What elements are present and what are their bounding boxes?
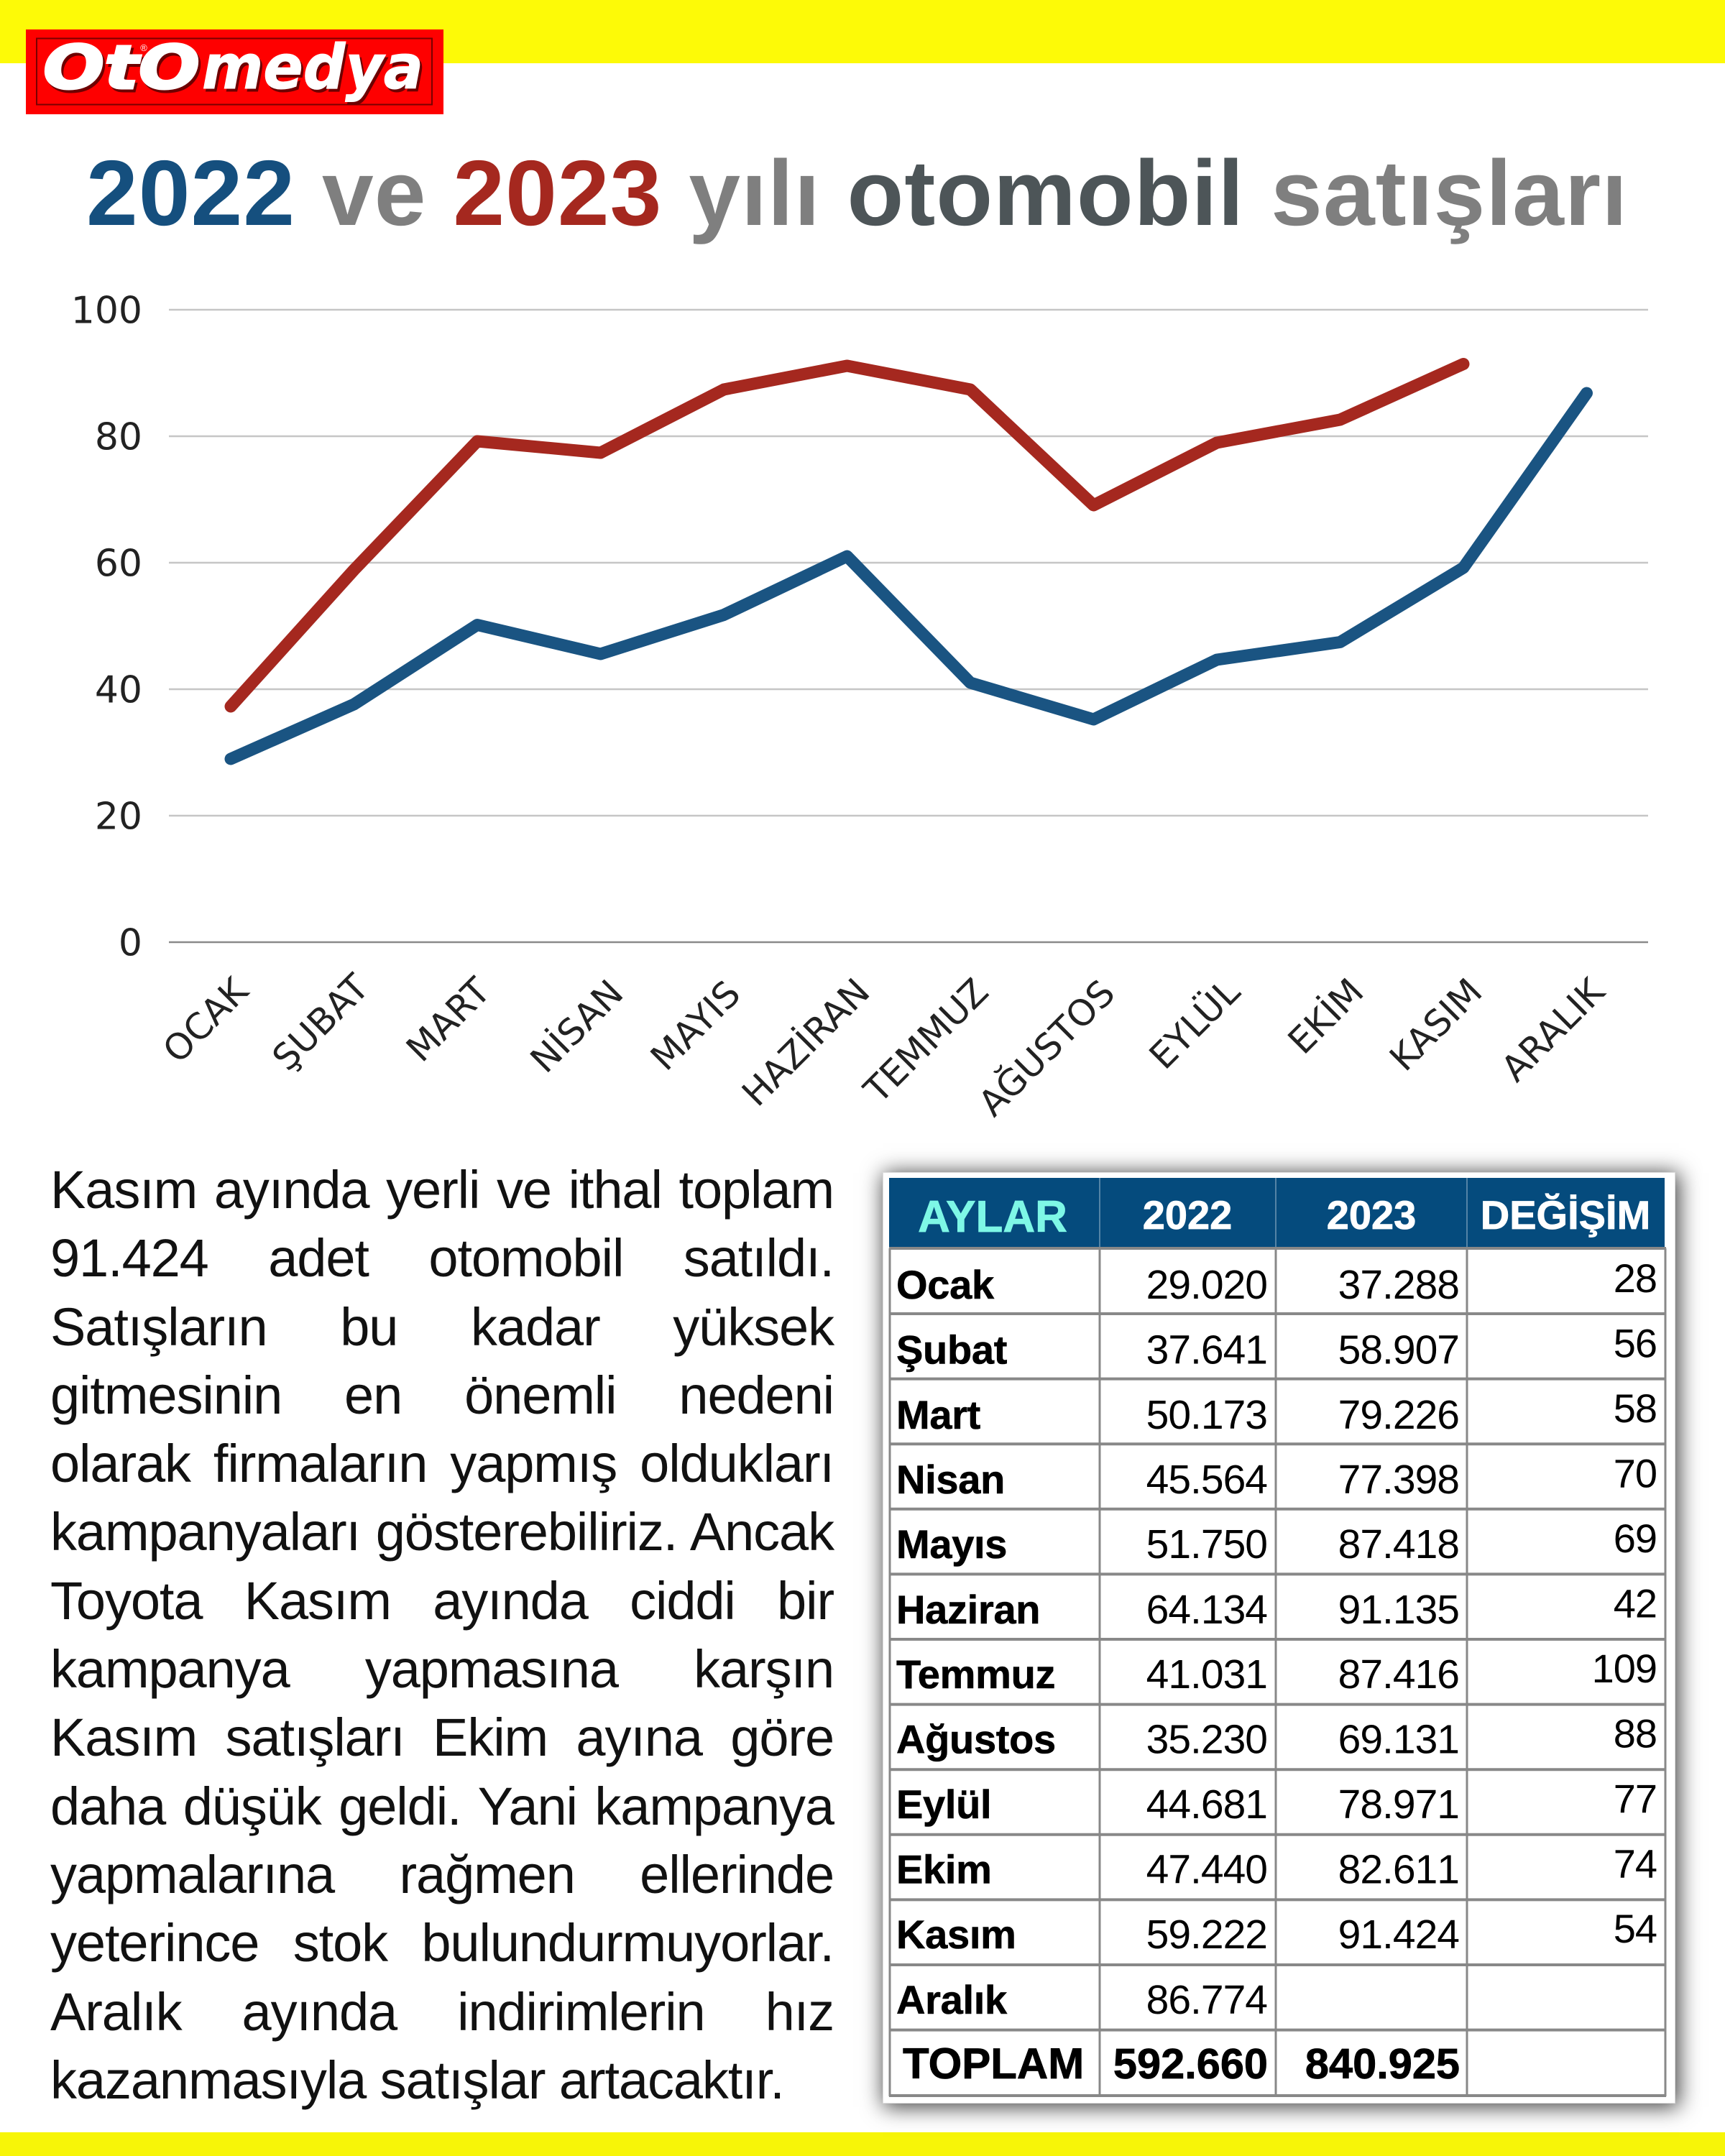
2023 column: 87.418	[1338, 1521, 1459, 1567]
table header: 2022	[1143, 1192, 1232, 1238]
x axis labels: NİSAN	[523, 972, 631, 1081]
2022 column: 29.020	[1146, 1262, 1267, 1308]
month labels: Ocak	[896, 1262, 995, 1307]
y axis labels: 80	[95, 415, 142, 459]
data table panel	[883, 1173, 1675, 2103]
month labels: Nisan	[896, 1457, 1005, 1502]
total row: 592.660	[1113, 2040, 1268, 2088]
line chart	[71, 289, 1648, 1125]
total row	[903, 2040, 1460, 2088]
month labels: Ekim	[896, 1847, 992, 1892]
2023 column: 87.416	[1338, 1651, 1459, 1697]
change column: 42	[1614, 1581, 1657, 1626]
month labels: Ağustos	[896, 1716, 1056, 1762]
2022 column: 86.774	[1146, 1977, 1267, 2023]
bottom yellow band	[0, 2132, 1725, 2156]
body paragraph: kazanmasıyla satışlar artacaktır.	[50, 2050, 784, 2110]
2023 column: 58.907	[1338, 1327, 1459, 1373]
change column	[1592, 1256, 1657, 1951]
x axis labels	[155, 966, 1613, 1125]
x axis labels: AĞUSTOS	[970, 972, 1123, 1125]
change column: 77	[1614, 1776, 1657, 1821]
y axis labels: 20	[95, 795, 142, 838]
x axis labels: MART	[398, 969, 499, 1070]
table header: AYLAR	[918, 1192, 1067, 1242]
body paragraph: yeterince stok bulundurmuyorlar.	[50, 1913, 834, 1973]
2022 column	[1146, 1262, 1267, 2023]
title: 2022 ve 2023 yılı otomobil satışları	[86, 142, 1627, 245]
body paragraph: kampanya yapmasına karşın	[50, 1639, 834, 1699]
2023 column: 91.424	[1338, 1912, 1459, 1958]
2022 column: 37.641	[1146, 1327, 1267, 1373]
y axis labels: 0	[119, 921, 142, 964]
total row: 840.925	[1305, 2040, 1460, 2088]
2022 column: 50.173	[1146, 1392, 1267, 1438]
month labels: Haziran	[896, 1587, 1040, 1632]
body paragraph: gitmesinin en önemli nedeni	[50, 1365, 834, 1425]
body paragraph: olarak firmaların yapmış oldukları	[50, 1434, 834, 1493]
x axis labels: KASIM	[1381, 970, 1490, 1079]
body paragraph: Aralık ayında indirimlerin hız	[50, 1982, 834, 2042]
logo: OtOmedya	[26, 29, 443, 114]
month labels: Kasım	[896, 1912, 1016, 1957]
change column: 28	[1614, 1256, 1657, 1301]
x axis labels: ŞUBAT	[264, 966, 377, 1079]
2022 column: 41.031	[1146, 1651, 1267, 1697]
x axis labels: HAZİRAN	[734, 970, 878, 1115]
top yellow band	[0, 0, 1725, 63]
total row: TOPLAM	[903, 2040, 1084, 2088]
logo: OtOmedya: ®	[140, 42, 147, 53]
y axis labels: 100	[71, 289, 142, 332]
body paragraph: kampanyaları gösterebiliriz. Ancak	[50, 1502, 834, 1562]
month labels	[896, 1262, 1056, 2022]
month labels: Mart	[896, 1392, 980, 1437]
body paragraph: yapmalarına rağmen ellerinde	[50, 1845, 834, 1904]
2023 column	[1338, 1262, 1459, 1958]
2022 column: 51.750	[1146, 1521, 1267, 1567]
x axis labels: EYLÜL	[1141, 970, 1248, 1077]
2023 column: 69.131	[1338, 1716, 1459, 1762]
2022 column: 59.222	[1146, 1912, 1267, 1958]
2023 column: 82.611	[1338, 1847, 1459, 1893]
2023 column: 37.288	[1338, 1262, 1459, 1308]
y axis labels: 60	[95, 542, 142, 585]
x axis labels: MAYIS	[643, 972, 748, 1079]
change column: 74	[1614, 1841, 1657, 1886]
body paragraph: Kasım ayında yerli ve ithal toplam	[50, 1160, 834, 1220]
x axis labels: EKİM	[1280, 970, 1371, 1062]
2022 column: 44.681	[1146, 1782, 1267, 1828]
body paragraph: 91.424 adet otomobil satıldı.	[50, 1228, 834, 1288]
2023 column: 79.226	[1338, 1392, 1459, 1438]
2022 column: 64.134	[1146, 1587, 1267, 1633]
y axis labels	[71, 289, 142, 964]
body paragraph: daha düşük geldi. Yani kampanya	[50, 1777, 834, 1836]
body paragraph	[50, 1160, 835, 2110]
change column: 109	[1592, 1646, 1657, 1691]
body paragraph: Kasım satışları Ekim ayına göre	[50, 1708, 834, 1767]
change column: 58	[1614, 1386, 1657, 1431]
2022 column: 35.230	[1146, 1716, 1267, 1762]
y axis labels: 40	[95, 668, 142, 711]
2023 column: 91.135	[1338, 1587, 1459, 1633]
body paragraph: Satışların bu kadar yüksek	[50, 1297, 834, 1357]
table header	[889, 1178, 1665, 1248]
body paragraph: Toyota Kasım ayında ciddi bir	[50, 1571, 834, 1631]
table header: DEĞİŞİM	[1481, 1192, 1650, 1238]
x axis labels: ARALIK	[1494, 970, 1613, 1089]
table header: 2023	[1327, 1192, 1416, 1238]
logo: OtOmedya: OtO	[43, 32, 200, 103]
2023 column: 78.971	[1338, 1782, 1459, 1828]
series: 2022	[231, 393, 1587, 759]
change column: 56	[1614, 1321, 1657, 1365]
2022 column: 47.440	[1146, 1847, 1267, 1893]
change column: 88	[1614, 1710, 1657, 1756]
x axis labels: OCAK	[155, 969, 257, 1071]
month labels: Temmuz	[896, 1651, 1055, 1697]
logo: OtOmedya: medya	[202, 32, 423, 103]
month labels: Mayıs	[896, 1521, 1007, 1567]
change column: 54	[1614, 1906, 1657, 1951]
table grid	[889, 1248, 1666, 2096]
month labels: Eylül	[896, 1782, 991, 1827]
change column: 69	[1614, 1516, 1657, 1561]
month labels: Aralık	[896, 1977, 1008, 2022]
series: 2023	[231, 364, 1463, 706]
month labels: Şubat	[896, 1327, 1007, 1373]
2022 column: 45.564	[1146, 1457, 1267, 1503]
change column: 70	[1614, 1450, 1657, 1496]
2023 column: 77.398	[1338, 1457, 1459, 1503]
x axis labels: TEMMUZ	[855, 970, 996, 1112]
